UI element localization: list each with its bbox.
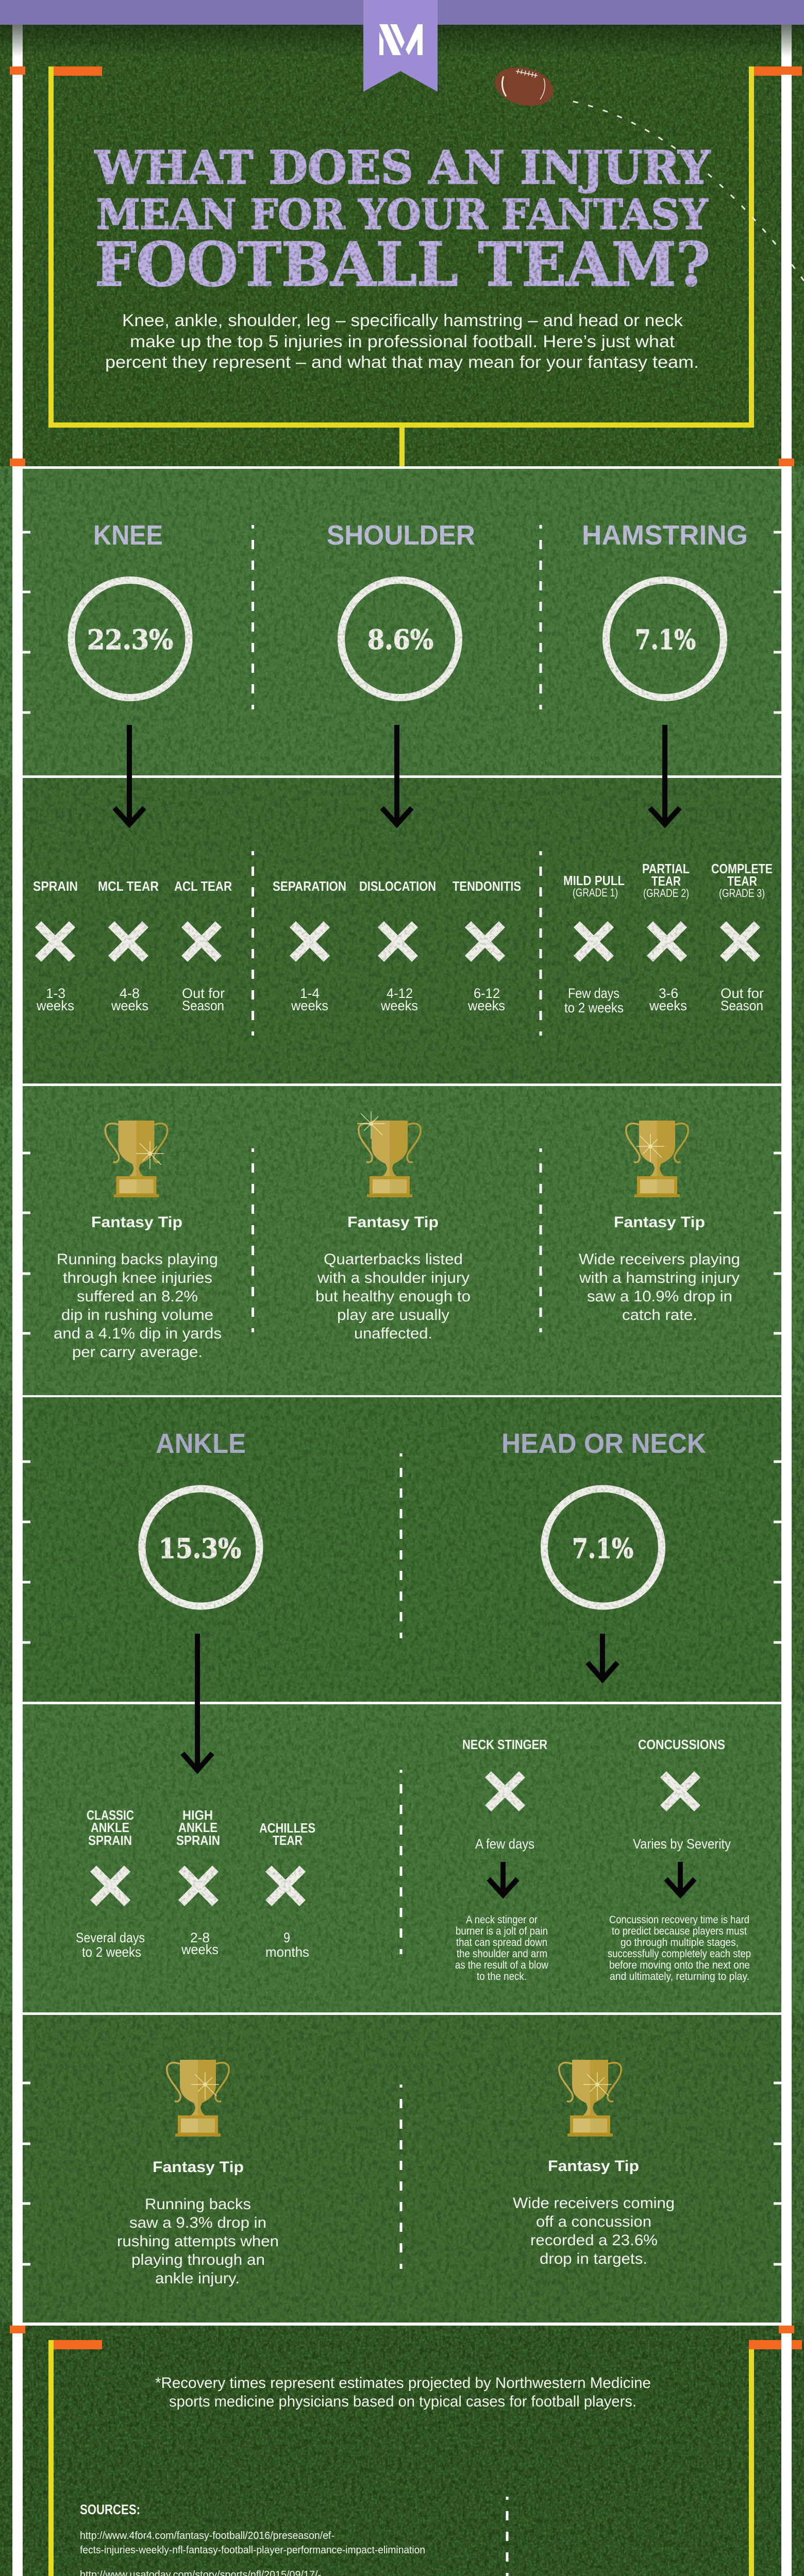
sources list: fects-injuries-weekly-nfl-fantasy-football-player-performance-impact-elimination (80, 2545, 425, 2556)
head and neck column: NECK STINGER (462, 1737, 547, 1752)
tip: shoulder: Quarterbacks listed (324, 1251, 463, 1268)
tip: ankle: playing through an (131, 2251, 265, 2268)
ankle durations: to 2 weeks (82, 1944, 141, 1960)
head and neck column: that can spread down (456, 1937, 547, 1948)
recovery durations: Out for (182, 986, 225, 1001)
stat: ankle 15.3% (142, 1489, 260, 1606)
head and neck column: burner is a jolt of pain (456, 1925, 548, 1937)
football trajectory (573, 101, 804, 281)
title (94, 141, 711, 300)
goal post (48, 66, 802, 466)
head and neck column: A few days (475, 1836, 534, 1852)
head and neck column: the shoulder and arm (457, 1948, 547, 1960)
recovery durations: to 2 weeks (564, 1000, 624, 1015)
injury labels: TENDONITIS (453, 878, 521, 894)
recovery durations: weeks (649, 998, 687, 1013)
injury labels (33, 861, 773, 900)
tip: knee: suffered an 8.2% (77, 1288, 198, 1305)
stat: shoulder 8.6% (341, 580, 459, 698)
injury labels: MCL TEAR (98, 878, 159, 894)
recovery durations: 3-6 (659, 986, 678, 1001)
recovery durations: weeks (467, 998, 505, 1013)
tip: shoulder (315, 1214, 471, 1342)
dashed divider (400, 2084, 402, 2269)
tip: shoulder: Fantasy Tip (347, 1214, 439, 1231)
heading: hamstring: HAMSTRING (582, 520, 748, 551)
recovery durations: Out for (721, 986, 764, 1001)
sources list: http://www.4for4.com/fantasy-football/2016/preseason/ef- (80, 2530, 334, 2541)
ankle labels: SPRAIN (176, 1833, 220, 1848)
ankle labels: SPRAIN (88, 1833, 132, 1848)
head and neck column: Varies by Severity (633, 1836, 731, 1852)
ankle durations: 2-8 (190, 1930, 210, 1945)
stat: head or neck 7.1% (544, 1489, 662, 1606)
panel: fantasy tips row two (23, 2015, 781, 2323)
ankle durations: 9 (283, 1930, 290, 1945)
ankle labels: CLASSIC (87, 1807, 134, 1823)
tip: hamstring (579, 1214, 740, 1324)
ankle labels: ACHILLES (259, 1820, 315, 1836)
head and neck column: CONCUSSIONS (638, 1737, 725, 1752)
icon: trophy ankle (167, 2060, 229, 2137)
injury labels: MILD PULL (563, 873, 625, 888)
tip: shoulder: but healthy enough to (315, 1288, 471, 1305)
tip: hamstring: catch rate. (622, 1307, 697, 1324)
tip: ankle: ankle injury. (155, 2270, 240, 2287)
head and neck column (455, 1737, 751, 1982)
tip: knee: through knee injuries (63, 1269, 212, 1286)
injury labels: ACL TEAR (174, 878, 232, 894)
head and neck column: as the result of a blow (455, 1959, 549, 1971)
icon: X marks ankle (93, 1869, 303, 1903)
heading: knee: KNEE (93, 520, 163, 551)
tip: ankle: rushing attempts when (117, 2233, 279, 2250)
tip: knee: Fantasy Tip (91, 1214, 182, 1231)
dashed divider (400, 1770, 402, 1954)
injury labels: (GRADE 3) (719, 887, 765, 900)
recovery durations (36, 986, 764, 1015)
ankle labels: ANKLE (91, 1820, 129, 1835)
yard marks (23, 532, 781, 713)
icon: trophy knee (105, 1121, 167, 1197)
injury labels: DISLOCATION (359, 878, 436, 894)
icon: trophy shoulder (357, 1111, 421, 1197)
ankle labels: TEAR (273, 1833, 303, 1848)
recovery durations: 4-8 (120, 986, 140, 1001)
icon: X marks head (488, 1774, 697, 1808)
recovery durations: weeks (36, 998, 74, 1013)
tip: knee (54, 1214, 222, 1361)
goal post (48, 2340, 802, 2576)
injury labels: COMPLETE (711, 861, 773, 876)
recovery durations: 6-12 (474, 986, 500, 1001)
head and neck column: before moving onto the next one (609, 1959, 750, 1971)
ankle durations (76, 1930, 309, 1960)
injury labels: (GRADE 2) (643, 887, 689, 900)
ankle labels: HIGH (182, 1807, 213, 1823)
heading: shoulder: SHOULDER (327, 520, 475, 551)
head and neck column: Concussion recovery time is hard (609, 1914, 749, 1926)
recovery durations: 4-12 (387, 986, 413, 1001)
tip: knee: and a 4.1% dip in yards (54, 1325, 222, 1342)
tip: knee: dip in rushing volume (61, 1307, 213, 1324)
head and neck column: go through multiple stages, (621, 1937, 739, 1948)
injury labels: SPRAIN (33, 878, 78, 894)
panel: knee shoulder hamstring stats (23, 469, 781, 775)
icon: X marks (38, 924, 757, 959)
tip: hamstring: saw a 10.9% drop in (587, 1288, 732, 1305)
tip: concussion: off a concussion (536, 2213, 651, 2230)
recovery durations: Few days (568, 986, 619, 1001)
icon: trophy hamstring (626, 1121, 688, 1197)
ankle labels: ANKLE (178, 1820, 217, 1835)
recovery durations: 1-3 (46, 986, 65, 1001)
recovery durations: weeks (291, 998, 328, 1013)
dashed dividers (253, 525, 541, 709)
ankle durations: weeks (181, 1942, 219, 1957)
injury labels: PARTIAL (642, 861, 690, 876)
tip: hamstring: Fantasy Tip (614, 1214, 705, 1231)
intro text: percent they represent – and what that may mean for your fantasy team. (105, 352, 699, 371)
panel: ankle and head recovery times (23, 1704, 781, 2012)
tip: concussion (513, 2158, 675, 2267)
tip: knee: Running backs playing (57, 1251, 218, 1268)
top banner (0, 0, 804, 92)
head and neck column: to predict because players must (612, 1925, 747, 1937)
arrow: shoulder (382, 725, 412, 824)
tip: ankle: Running backs (145, 2196, 251, 2213)
tip: ankle (117, 2159, 279, 2287)
panel: fantasy tips row one (23, 1086, 781, 1395)
icon: football (491, 61, 558, 112)
tip: shoulder: with a shoulder injury (317, 1269, 470, 1286)
tip: concussion: Fantasy Tip (548, 2158, 639, 2175)
arrow: knee (114, 725, 144, 824)
stat: knee 22.3% (71, 580, 189, 698)
recovery durations: weeks (380, 998, 418, 1013)
tip: hamstring: with a hamstring injury (579, 1269, 740, 1286)
stat: shoulder 8.6%: 8.6% (367, 624, 433, 656)
injury labels: TEAR (651, 873, 681, 889)
tip: concussion: Wide receivers coming (513, 2195, 675, 2212)
head and neck column: to the neck. (477, 1971, 527, 1982)
sources list: SOURCES: (80, 2502, 140, 2517)
panel: knee shoulder hamstring recovery times (23, 778, 781, 1083)
ankle durations: Several days (76, 1930, 145, 1945)
title: MEAN FOR YOUR FANTASY (96, 190, 708, 239)
stat: ankle 15.3%: 15.3% (159, 1533, 241, 1565)
recovery durations: 1-4 (300, 986, 320, 1001)
ribbon with logo (363, 0, 438, 92)
injury labels: SEPARATION (273, 878, 346, 894)
sources list (80, 2502, 472, 2576)
recovery durations: Season (721, 998, 763, 1013)
intro text (105, 311, 699, 371)
footnote (155, 2375, 651, 2410)
footnote: *Recovery times represent estimates projected by Northwestern Medicine (155, 2375, 651, 2392)
tip: ankle: Fantasy Tip (153, 2159, 244, 2176)
head and neck column: A neck stinger or (466, 1914, 538, 1926)
ankle durations: months (265, 1944, 309, 1960)
intro text: Knee, ankle, shoulder, leg – specifically hamstring – and head or neck (122, 311, 683, 330)
tip: concussion: recorded a 23.6% (530, 2232, 658, 2249)
heading: head or neck: HEAD OR NECK (501, 1428, 706, 1459)
panel: ankle and head stats (23, 1397, 781, 1702)
stat: knee 22.3%: 22.3% (87, 624, 173, 656)
tip: ankle: saw a 9.3% drop in (129, 2214, 266, 2231)
stat: hamstring 7.1% (606, 580, 724, 698)
title: FOOTBALL TEAM? (95, 230, 710, 300)
stat: hamstring 7.1%: 7.1% (635, 624, 696, 656)
yard marks (23, 2083, 781, 2264)
icon: trophy head (559, 2060, 621, 2137)
heading: ankle: ANKLE (156, 1428, 246, 1459)
arrow: neck stinger (489, 1862, 517, 1896)
footnote: sports medicine physicians based on typical cases for football players. (169, 2393, 636, 2410)
ankle labels (87, 1807, 315, 1848)
injury labels: (GRADE 1) (573, 886, 618, 899)
recovery durations: weeks (111, 998, 148, 1013)
head and neck column: and ultimately, returning to play. (610, 1971, 749, 1982)
head and neck column: successfully completely each step (608, 1948, 751, 1960)
panel: footer end zone (0, 2326, 804, 2576)
intro text: make up the top 5 injuries in professional football. Here’s just what (130, 332, 675, 351)
tip: concussion: drop in targets. (540, 2250, 647, 2267)
arrow: hamstring (650, 725, 680, 824)
dashed divider (506, 2497, 508, 2576)
arrow: concussions (666, 1862, 695, 1896)
yard marks (23, 1153, 781, 1333)
tip: hamstring: Wide receivers playing (579, 1251, 740, 1268)
recovery durations: Season (182, 998, 224, 1013)
arrow: head or neck (588, 1634, 617, 1680)
tip: shoulder: play are usually (337, 1307, 449, 1324)
arrow: ankle (182, 1634, 212, 1770)
yard marks (23, 1462, 781, 1642)
dashed divider (400, 1453, 402, 1638)
dashed dividers (253, 1148, 541, 1332)
dashed dividers (253, 851, 541, 1036)
title: WHAT DOES AN INJURY (94, 141, 711, 194)
panel: hero (48, 61, 804, 466)
tip: knee: per carry average. (72, 1344, 203, 1361)
tip: shoulder: unaffected. (354, 1325, 432, 1342)
injury labels: TEAR (727, 873, 757, 889)
stat: head or neck 7.1%: 7.1% (572, 1533, 633, 1565)
